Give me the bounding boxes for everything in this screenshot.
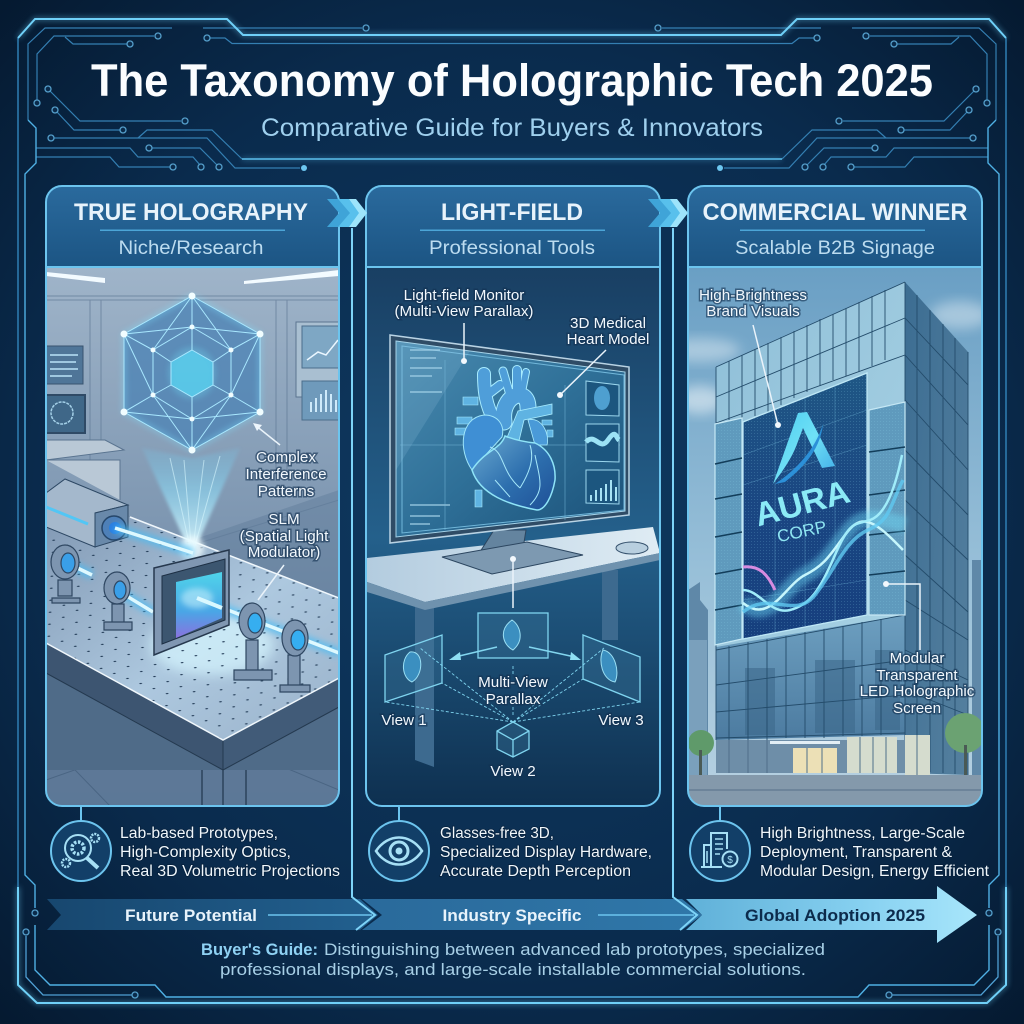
icon: eye <box>369 806 429 881</box>
callout: high-brightness brand visuals <box>699 287 807 428</box>
arrow: global adoption: Global Adoption 2025 <box>745 906 925 925</box>
trees <box>688 713 985 775</box>
callout: SLM <box>240 511 329 600</box>
icon: buildings with coin <box>690 806 750 881</box>
callout: heart model: Heart Model <box>567 331 649 348</box>
arrow: industry specific: Industry Specific <box>442 906 582 925</box>
arrow: future potential <box>47 899 378 930</box>
wall monitors <box>46 322 339 500</box>
laser beams <box>67 528 339 653</box>
callout: modular transparent LED screen <box>860 581 975 717</box>
callout: high-brightness brand visuals: High-Brightness <box>699 287 807 304</box>
callout: SLM: Modulator) <box>248 544 320 561</box>
multi-view parallax diagram: View 2 <box>490 763 536 780</box>
buyer's guide note: Distinguishing between advanced lab prototypes, specialized <box>324 940 825 959</box>
illustration: light-field monitor on desk <box>366 268 660 806</box>
callout: complex interference patterns <box>245 423 327 500</box>
panel 3 header <box>688 186 982 266</box>
callout: high-brightness brand visuals: Brand Visuals <box>706 303 800 320</box>
callout: complex interference patterns: Patterns <box>258 483 315 500</box>
callout: SLM: SLM <box>268 511 300 528</box>
illustration: optics lab with volumetric hologram <box>46 268 339 806</box>
callout: heart model: 3D Medical <box>570 315 646 332</box>
side LED modules <box>715 402 905 645</box>
arrow: industry specific <box>362 899 702 930</box>
arrow: future potential: Future Potential <box>125 906 257 925</box>
panel: commercial winner <box>687 185 983 807</box>
text: features: High Brightness, Large-Scale <box>760 825 965 842</box>
panel: light-field <box>366 186 660 806</box>
light waves <box>743 455 905 612</box>
multi-view parallax diagram: Parallax <box>486 691 541 708</box>
panel 2 header: Professional Tools <box>429 238 595 259</box>
callout: SLM: (Spatial Light <box>240 528 329 545</box>
icon: buildings with coin: $ <box>727 855 733 866</box>
callout: light-field monitor: Light-field Monitor <box>404 287 524 304</box>
panel 1 header: TRUE HOLOGRAPHY <box>74 199 308 226</box>
feature row: commercial winner <box>690 806 990 881</box>
tower <box>715 282 968 775</box>
laser source <box>46 479 128 547</box>
title: The Taxonomy of Holographic Tech 2025 <box>91 55 933 106</box>
text: features: Deployment, Transparent & <box>760 844 953 861</box>
progress band arrows <box>47 228 977 943</box>
panel 1 header: Niche/Research <box>118 238 264 259</box>
arrow: global adoption <box>686 886 977 943</box>
text: features: Real 3D Volumetric Projections <box>120 863 340 880</box>
panel: true holography <box>46 186 339 806</box>
callout: modular transparent LED screen: LED Holographic <box>860 683 975 700</box>
callout: light-field monitor <box>395 287 533 364</box>
multi-view parallax diagram <box>381 556 644 780</box>
callout: modular transparent LED screen: Screen <box>893 700 941 717</box>
3D heart <box>455 370 555 510</box>
hologram <box>120 292 264 454</box>
callout: complex interference patterns: Complex <box>256 449 316 466</box>
subtitle: Comparative Guide for Buyers & Innovators <box>261 114 763 142</box>
text: features: Glasses-free 3D, <box>440 825 554 842</box>
multi-view parallax diagram: View 3 <box>598 712 644 729</box>
multi-view parallax diagram: Multi-View <box>478 674 548 691</box>
multi-view parallax diagram: View 1 <box>381 712 427 729</box>
callout: light-field monitor: (Multi-View Parallax) <box>395 303 533 320</box>
LED screen: Aura Corp <box>743 373 905 639</box>
panel 3 header: Scalable B2B Signage <box>735 238 935 259</box>
desk <box>367 527 660 767</box>
icon: magnifier with gears <box>51 806 111 881</box>
callout: complex interference patterns: Interference <box>245 466 327 483</box>
lens mounts <box>51 545 310 692</box>
illustration: office tower with LED screen <box>689 268 981 805</box>
light cone from SLM <box>142 448 240 560</box>
callout: heart model <box>557 315 649 398</box>
buyer's guide note: professional displays, and large-scale installable commercial solutions. <box>220 960 806 979</box>
text: features: High-Complexity Optics, <box>120 844 291 861</box>
optical table <box>46 517 339 806</box>
panel 3 header: COMMERCIAL WINNER <box>702 199 968 226</box>
text: features: Lab-based Prototypes, <box>120 825 278 842</box>
text: features: Specialized Display Hardware, <box>440 844 652 861</box>
callout: modular transparent LED screen: Transparent <box>876 667 958 684</box>
callout: modular transparent LED screen: Modular <box>890 650 944 667</box>
Aura logo mark <box>773 412 835 484</box>
panel 2 header: LIGHT-FIELD <box>441 199 583 226</box>
panel 2 header <box>366 186 660 266</box>
LED screen: Aura Corp: CORP <box>775 517 828 546</box>
text: features: Accurate Depth Perception <box>440 863 631 880</box>
text: features: Modular Design, Energy Efficient <box>760 863 990 880</box>
buyer's guide note: Buyer's Guide: <box>201 940 318 959</box>
panel 1 header <box>46 186 339 266</box>
skyline <box>688 560 982 775</box>
monitor <box>390 335 629 574</box>
feature row: light-field <box>369 806 652 881</box>
feature row: true holography <box>51 806 340 881</box>
chevrons between panels 2 and 3 <box>648 199 688 227</box>
LED screen: Aura Corp: AURA <box>750 472 854 533</box>
SLM device <box>154 550 229 655</box>
chevrons between panels 1 and 2 <box>327 199 367 227</box>
